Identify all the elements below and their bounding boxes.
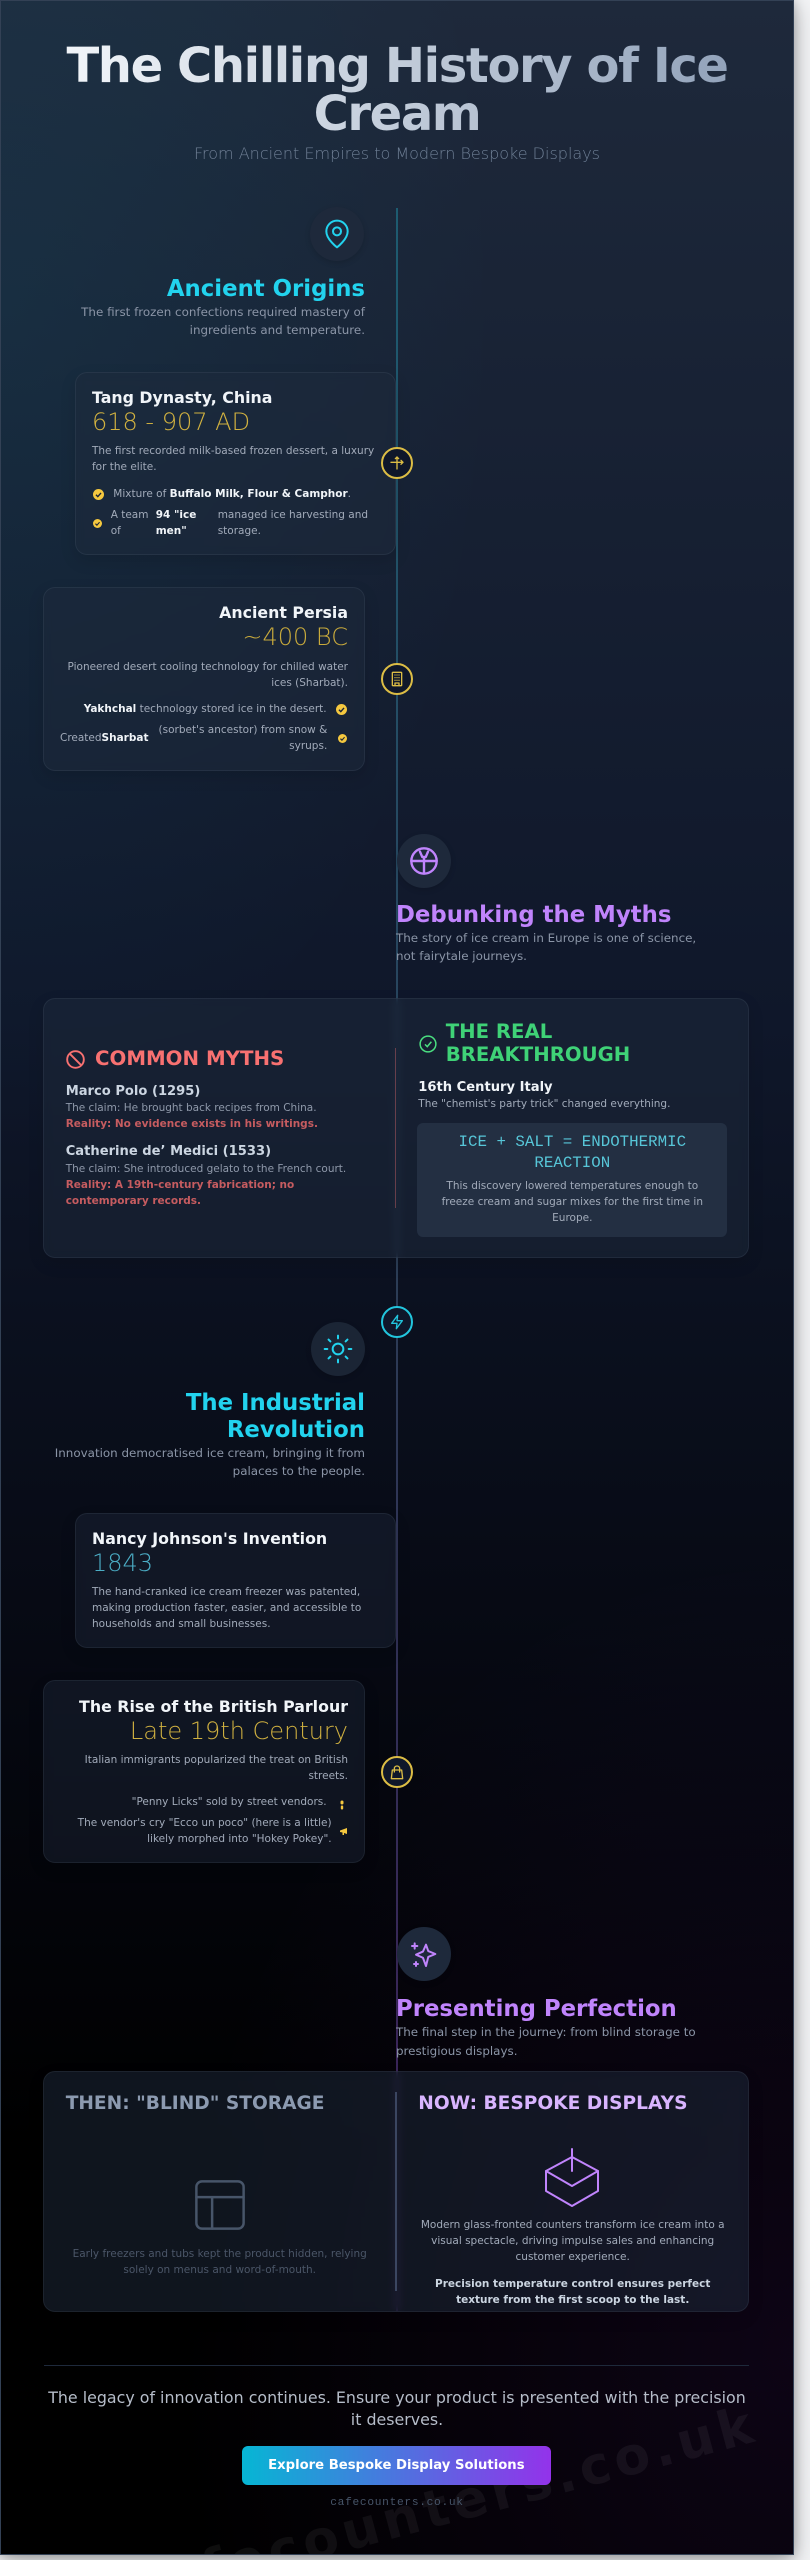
closing text bbox=[0, 2387, 794, 2430]
heading bbox=[186, 1390, 365, 1443]
icon: signpost bbox=[390, 456, 404, 470]
icon: megaphone bbox=[340, 1828, 347, 1835]
date: 618 - 907 AD bbox=[92, 408, 250, 436]
list item: ice men bbox=[93, 509, 368, 537]
column: real breakthrough bbox=[417, 1020, 727, 1237]
formula box bbox=[417, 1123, 727, 1237]
center divider bbox=[395, 1048, 396, 1208]
description: The final step in the journey: from blind storage to bbox=[396, 2025, 696, 2039]
date: 1843 bbox=[92, 1549, 153, 1577]
description: customer experience. bbox=[516, 2251, 630, 2263]
explanation: This discovery lowered temperatures enough to bbox=[446, 1180, 698, 1192]
myth: catherine de medici: contemporary records. bbox=[66, 1195, 201, 1207]
description: solely on menus and word-of-mouth. bbox=[123, 2264, 316, 2276]
panel: then vs now bbox=[43, 2071, 749, 2312]
explanation bbox=[442, 1180, 703, 1224]
heading: Debunking the Myths bbox=[396, 902, 671, 928]
section header: debunking the myths bbox=[396, 834, 696, 963]
list item: ice men: storage. bbox=[218, 525, 261, 537]
description bbox=[92, 1586, 361, 1630]
title: The Chilling History of Ice bbox=[66, 38, 728, 94]
node: zap bbox=[380, 1306, 412, 1338]
closing text: The legacy of innovation continues. Ensure your product is presented with the precision bbox=[48, 2388, 746, 2407]
heading: THEN: "BLIND" STORAGE bbox=[66, 2093, 324, 2114]
card: tang dynasty bbox=[75, 372, 396, 555]
subtitle: From Ancient Empires to Modern Bespoke Displays bbox=[194, 144, 600, 163]
list item: sharbat: (sorbet's ancestor) from snow & bbox=[159, 724, 327, 736]
closing text: it deserves. bbox=[351, 2410, 443, 2429]
heading: THE REAL bbox=[446, 1020, 552, 1043]
icon: building bbox=[392, 672, 402, 686]
description: for the elite. bbox=[92, 461, 157, 473]
description bbox=[55, 1446, 365, 1478]
card title: Ancient Persia bbox=[219, 603, 348, 622]
icon: check bbox=[93, 519, 102, 528]
card title: The Rise of the British Parlour bbox=[79, 1697, 348, 1716]
timeline line bbox=[396, 208, 398, 2311]
description: The "chemist's party trick" changed everything. bbox=[418, 1098, 670, 1110]
icon: ice cream bbox=[340, 1800, 344, 1810]
description: Pioneered desert cooling technology for chilled water bbox=[68, 661, 348, 673]
formula bbox=[459, 1133, 686, 1172]
node: shopping bag bbox=[380, 1756, 412, 1788]
highlight text: texture from the first scoop to the last. bbox=[456, 2294, 689, 2306]
list item: ice men: of bbox=[111, 525, 121, 537]
list item: ice men: 94 "ice bbox=[156, 509, 196, 521]
description: making production faster, easier, and accessible to bbox=[92, 1602, 361, 1614]
description bbox=[68, 661, 348, 689]
node: building bbox=[380, 663, 412, 695]
list item: sharbat: syrups. bbox=[289, 740, 327, 752]
myth: marco polo bbox=[66, 1084, 318, 1130]
icon: layout bbox=[193, 2178, 247, 2232]
heading: BREAKTHROUGH bbox=[446, 1043, 630, 1066]
formula: ICE + SALT = ENDOTHERMIC bbox=[459, 1133, 686, 1151]
description bbox=[85, 1754, 348, 1782]
heading: Ancient Origins bbox=[167, 276, 365, 302]
description: Early freezers and tubs kept the product hidden, relying bbox=[73, 2248, 367, 2260]
section header: industrial revolution bbox=[55, 1322, 365, 1478]
icon: check bbox=[93, 489, 104, 500]
icon: shopping bag bbox=[390, 1765, 404, 1780]
column: common myths bbox=[66, 1047, 346, 1207]
list item: mixture: Mixture of Buffalo Milk, Flour & Camphor. bbox=[113, 488, 351, 500]
center divider bbox=[395, 2092, 397, 2291]
icon: check bbox=[336, 704, 347, 715]
section header: presenting perfection bbox=[396, 1927, 696, 2058]
panel: myths vs breakthrough bbox=[43, 998, 749, 1258]
heading: COMMON MYTHS bbox=[95, 1047, 284, 1070]
description bbox=[43, 2246, 396, 2278]
description: prestigious displays. bbox=[396, 2044, 517, 2058]
header bbox=[66, 38, 728, 163]
divider bbox=[44, 2364, 749, 2366]
icon: ban bbox=[66, 1050, 85, 1069]
list item: hokey pokey: likely morphed into "Hokey Pokey". bbox=[147, 1833, 332, 1845]
description: The first recorded milk-based frozen dessert, a luxury bbox=[92, 445, 374, 457]
icon: check bbox=[338, 734, 347, 743]
description bbox=[396, 2025, 696, 2058]
title bbox=[40, 42, 754, 138]
card: nancy johnson bbox=[75, 1513, 396, 1648]
call to action button: Explore Bespoke Display Solutions bbox=[268, 2458, 525, 2473]
card: ancient persia bbox=[43, 587, 365, 771]
icon: globe bbox=[397, 834, 451, 888]
node: signpost bbox=[380, 447, 412, 479]
description: The hand-cranked ice cream freezer was patented, bbox=[92, 1586, 360, 1598]
formula: REACTION bbox=[534, 1154, 610, 1172]
myth: catherine de medici bbox=[66, 1144, 346, 1207]
heading: Revolution bbox=[227, 1417, 365, 1443]
myth: catherine de medici: The claim: She introduced gelato to the French court. bbox=[66, 1163, 346, 1175]
list item: yakhchal: Yakhchal technology stored ice in the desert. bbox=[84, 703, 327, 715]
myth: marco polo: Marco Polo (1295) bbox=[66, 1084, 200, 1099]
list item: ice men: managed ice harvesting and bbox=[218, 509, 368, 521]
list item: sharbat bbox=[60, 724, 347, 752]
highlight text: Precision temperature control ensures perfect bbox=[435, 2278, 710, 2290]
highlight text bbox=[396, 2276, 749, 2308]
description: Modern glass-fronted counters transform ice cream into a bbox=[421, 2219, 725, 2231]
heading: Presenting Perfection bbox=[396, 1996, 677, 2022]
footer bbox=[0, 2360, 794, 2515]
description: The story of ice cream in Europe is one of science, bbox=[396, 931, 696, 945]
description: ices (Sharbat). bbox=[271, 677, 348, 689]
icon: sun bbox=[311, 1322, 365, 1376]
description: visual spectacle, driving impulse sales and enhancing bbox=[431, 2235, 714, 2247]
description bbox=[81, 305, 366, 337]
description: ingredients and temperature. bbox=[190, 323, 365, 337]
description: palaces to the people. bbox=[233, 1464, 365, 1478]
explanation: Europe. bbox=[552, 1212, 592, 1224]
myth: marco polo: Reality: No evidence exists in his writings. bbox=[66, 1118, 318, 1130]
description: streets. bbox=[308, 1770, 348, 1782]
date: ~400 BC bbox=[242, 623, 348, 651]
title: Cream bbox=[314, 86, 480, 142]
list item: penny licks: "Penny Licks" sold by street vendors. bbox=[132, 1796, 327, 1808]
section header: ancient origins bbox=[81, 220, 366, 337]
description: households and small businesses. bbox=[92, 1618, 271, 1630]
card title: Tang Dynasty, China bbox=[92, 388, 272, 407]
myth: marco polo: The claim: He brought back recipes from China. bbox=[66, 1102, 317, 1114]
list item: ice men: men" bbox=[156, 525, 187, 537]
description: Innovation democratised ice cream, bringing it from bbox=[55, 1446, 365, 1460]
list item: sharbat: CreatedSharbat bbox=[60, 732, 148, 744]
heading: The Industrial bbox=[186, 1390, 365, 1416]
description bbox=[396, 931, 696, 963]
description bbox=[92, 445, 374, 473]
myth: catherine de medici: Catherine de’ Medici (1533) bbox=[66, 1144, 271, 1159]
description: The first frozen confections required mastery of bbox=[81, 305, 365, 319]
icon: map pin bbox=[310, 207, 364, 261]
description bbox=[396, 2217, 749, 2265]
list item: ice men: A team bbox=[111, 509, 148, 521]
column: now bbox=[396, 2071, 748, 2312]
list item: hokey pokey bbox=[78, 1817, 347, 1845]
description: Italian immigrants popularized the treat on British bbox=[85, 1754, 348, 1766]
subheading: 16th Century Italy bbox=[418, 1080, 553, 1095]
icon: check circle bbox=[419, 1035, 437, 1053]
description: not fairytale journeys. bbox=[396, 949, 527, 963]
icon: zap bbox=[391, 1314, 403, 1330]
heading bbox=[446, 1020, 630, 1066]
heading: NOW: BESPOKE DISPLAYS bbox=[418, 2093, 687, 2114]
card title: Nancy Johnson's Invention bbox=[92, 1529, 327, 1548]
list item: hokey pokey: The vendor's cry "Ecco un poco" (here is a little) bbox=[78, 1817, 332, 1829]
card: british parlour bbox=[43, 1680, 365, 1863]
myth: catherine de medici: Reality: A 19th-century fabrication; no bbox=[66, 1179, 294, 1191]
icon: sparkles bbox=[397, 1927, 451, 1981]
explanation: freeze cream and sugar mixes for the first time in bbox=[442, 1196, 703, 1208]
column: then bbox=[66, 2093, 367, 2276]
call to action button bbox=[242, 2446, 551, 2485]
icon: box bbox=[543, 2147, 601, 2207]
date: Late 19th Century bbox=[130, 1717, 348, 1745]
website: cafecounters.co.uk bbox=[330, 2497, 464, 2509]
